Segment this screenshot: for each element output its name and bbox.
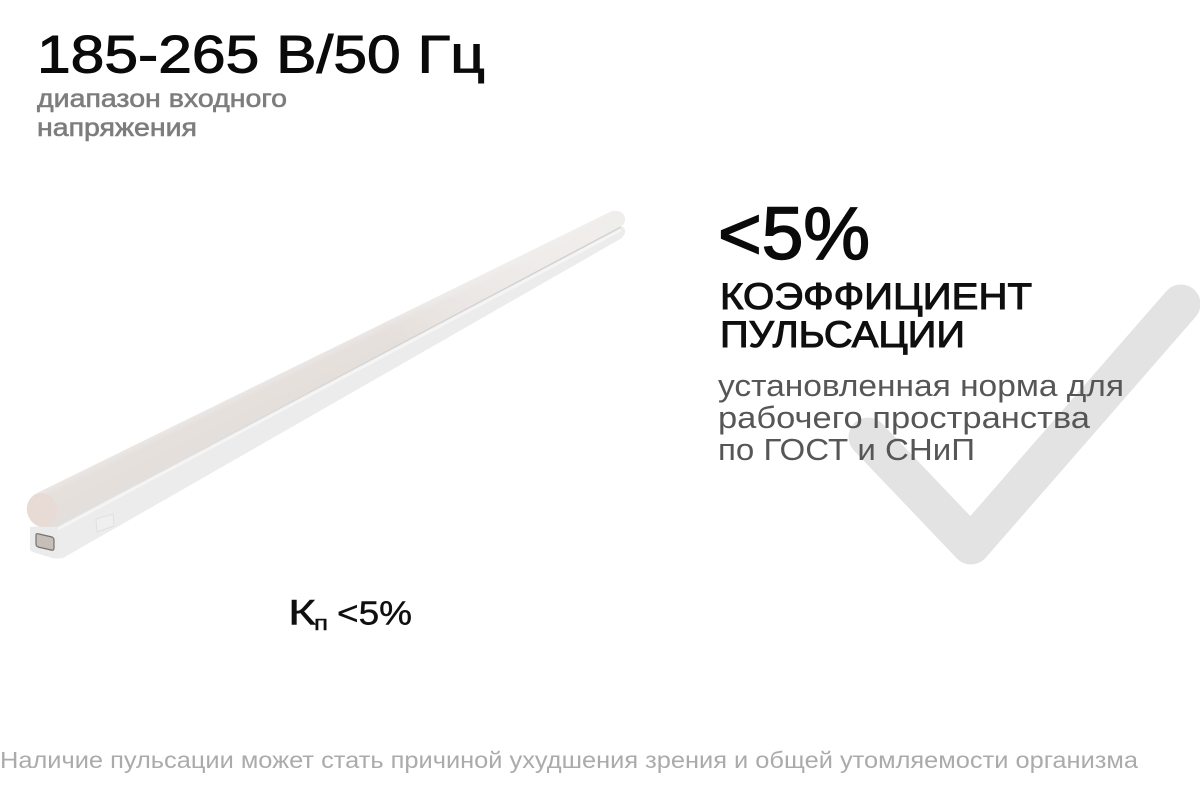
voltage caption: напряжения: [37, 114, 197, 142]
ripple heading: КОЭФФИЦИЕНТ: [720, 276, 1032, 317]
panel: ripple factor: [718, 192, 1124, 467]
background check mark: [868, 304, 1181, 545]
product label: <5%: [337, 594, 412, 632]
connector slot: [36, 534, 54, 550]
ripple description: по ГОСТ и СНиП: [718, 432, 975, 467]
product label: п: [314, 613, 328, 635]
ripple value: <5%: [718, 192, 870, 275]
ripple description: установленная норма для: [718, 368, 1124, 403]
ripple description: рабочего пространства: [718, 400, 1091, 435]
footer note: Наличие пульсации может стать причиной ухудшения зрения и общей утомляемости организма: [0, 747, 1138, 773]
voltage value: 185-265 В/50 Гц: [37, 26, 485, 84]
product label: К: [288, 594, 317, 632]
switch: [96, 514, 114, 532]
heading: voltage range: [37, 26, 485, 142]
voltage caption: диапазон входного: [37, 85, 287, 113]
product label: [288, 594, 412, 635]
ripple heading: ПУЛЬСАЦИИ: [720, 314, 965, 355]
diffuser end cap: [23, 490, 61, 530]
product image: LED linear lamp: [23, 211, 625, 558]
lamp diffuser: [33, 211, 625, 527]
lamp base: [30, 226, 625, 558]
lamp base front face: [30, 527, 58, 558]
